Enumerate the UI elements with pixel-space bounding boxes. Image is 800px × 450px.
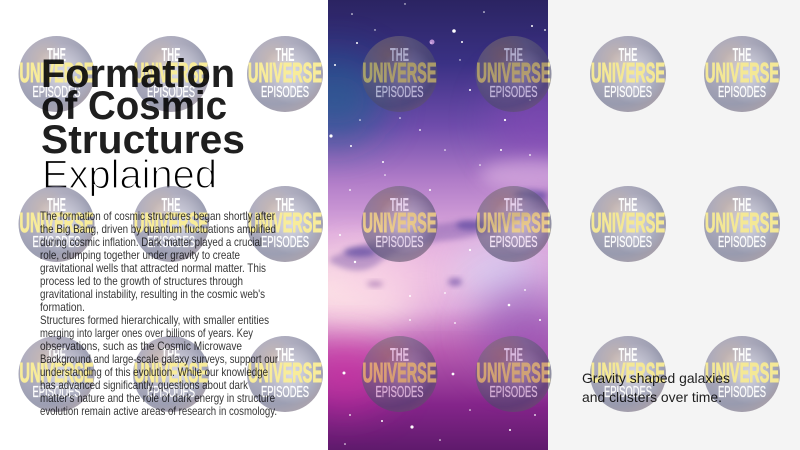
logo: row 1 col 7: THE [732,45,752,65]
logo: row 1 col 6: UNIVERSE [591,57,665,88]
logo: row 3 col 5: UNIVERSE [476,357,550,388]
logo: row 3 col 6: UNIVERSE [591,357,665,388]
logo: row 3 col 4: UNIVERSE [362,357,436,388]
panel: right background [548,0,800,450]
logo: row 2 col 1: UNIVERSE [20,207,94,238]
logo: row 2 col 7 [704,186,780,262]
caption [582,370,730,405]
body text: gravitational wells that attracted normal matter. This [40,261,266,275]
logo: row 1 col 2: UNIVERSE [134,57,208,88]
logo: row 2 col 6: EPISODES [604,234,652,251]
logo: row 3 col 6: THE [618,345,638,365]
logo: row 1 col 5 [476,36,552,112]
title: Formation [41,52,235,96]
logo: row 3 col 5: EPISODES [490,384,538,401]
title: of Cosmic [41,84,227,128]
logo: row 2 col 4: EPISODES [376,234,424,251]
logo: row 3 col 1: UNIVERSE [20,357,94,388]
logo: row 3 col 5: THE [504,345,523,365]
logo: row 2 col 4: UNIVERSE [362,207,436,238]
logo: row 1 col 5: THE [504,45,523,65]
logo: row 3 col 2: EPISODES [147,384,195,401]
body text: the Big Bang, driven by quantum fluctuations amplified [40,222,276,236]
logo: row 1 col 5: UNIVERSE [476,57,550,88]
logo: row 2 col 3 [247,186,323,262]
body text: process led to the growth of structures through [40,274,243,288]
logo: row 2 col 3: EPISODES [261,234,309,251]
logo: row 2 col 6 [590,186,666,262]
logo: row 2 col 6: THE [618,195,638,215]
logo: row 2 col 3: THE [276,195,294,215]
caption: and clusters over time. [582,389,722,405]
logo: row 1 col 3 [247,36,323,112]
logo: row 3 col 6 [590,336,666,412]
logo: row 1 col 3: EPISODES [261,84,309,101]
caption: Gravity shaped galaxies [582,370,730,386]
logo: row 1 col 7 [704,36,780,112]
logo: row 1 col 6: EPISODES [604,84,652,101]
logo: row 1 col 1 [18,36,94,112]
body text: during cosmic inflation. Dark matter played a crucial [40,235,262,249]
body text: Structures formed hierarchically, with smaller entities [40,313,269,327]
watermark logos [18,36,780,412]
logo: row 3 col 4: EPISODES [376,384,424,401]
logo: row 2 col 7: THE [732,195,752,215]
logo: row 2 col 4: THE [390,195,409,215]
logo: row 3 col 2: UNIVERSE [134,357,208,388]
logo: row 2 col 1: THE [47,195,66,215]
logo: row 1 col 4: THE [390,45,409,65]
logo: row 2 col 7: EPISODES [718,234,766,251]
body text: evolution remain active areas of research in cosmology. [40,404,277,418]
logo: row 3 col 1 [18,336,94,412]
logo: row 1 col 6 [590,36,666,112]
panel: galaxy image [328,0,548,450]
logo: row 3 col 6: EPISODES [604,384,652,401]
body text: Background and large-scale galaxy surveys, support our [40,352,278,366]
logo: row 3 col 2 [133,336,209,412]
logo: row 1 col 2 [133,36,209,112]
body text: merging into larger ones over billions of years. Key [40,326,253,340]
logo: row 3 col 7: THE [732,345,752,365]
body text [40,209,278,418]
logo: row 1 col 4: EPISODES [376,84,424,101]
logo: row 3 col 3: EPISODES [261,384,309,401]
logo: row 3 col 3: UNIVERSE [248,357,322,388]
logo: row 2 col 1: EPISODES [32,234,80,251]
logo: row 1 col 5: EPISODES [490,84,538,101]
logo: row 1 col 4 [362,36,438,112]
body text: matter's nature and the role of dark energy in structure [40,391,275,405]
logo: row 2 col 5: THE [504,195,523,215]
body text: role, clumping together under gravity to create [40,248,240,262]
logo: row 3 col 1: THE [47,345,66,365]
logo: row 2 col 5 [476,186,552,262]
logo: row 3 col 7: EPISODES [718,384,766,401]
logo: row 1 col 1: UNIVERSE [20,57,94,88]
logo: row 2 col 5: EPISODES [490,234,538,251]
logo: row 3 col 1: EPISODES [32,384,80,401]
body text: understanding of this evolution. While our knowledge [40,365,268,379]
logo: row 3 col 2: THE [162,345,180,365]
body text: formation. [40,300,85,314]
logo: row 3 col 3: THE [276,345,294,365]
logo: row 2 col 3: UNIVERSE [248,207,322,238]
logo: row 2 col 6: UNIVERSE [591,207,665,238]
body text: The formation of cosmic structures began shortly after [40,209,275,223]
logo: row 1 col 4: UNIVERSE [362,57,436,88]
logo: row 3 col 4 [362,336,438,412]
logo: row 2 col 2: THE [162,195,180,215]
logo: row 2 col 5: UNIVERSE [476,207,550,238]
subtitle word: Explained [42,153,217,197]
logo: row 2 col 2 [133,186,209,262]
logo: row 1 col 7: EPISODES [718,84,766,101]
logo: row 2 col 4 [362,186,438,262]
logo: row 1 col 3: THE [276,45,294,65]
logo: row 2 col 2: EPISODES [147,234,195,251]
logo: row 1 col 3: UNIVERSE [248,57,322,88]
title [41,52,245,162]
title: Structures [41,118,245,162]
logo: row 1 col 1: THE [47,45,66,65]
logo: row 1 col 2: THE [162,45,180,65]
logo: row 3 col 7 [704,336,780,412]
body text: has advanced significantly, questions about dark [40,378,249,392]
logo: row 1 col 1: EPISODES [32,84,80,101]
logo: row 2 col 2: UNIVERSE [134,207,208,238]
body text: gravitational instability, resulting in the cosmic web's [40,287,265,301]
logo: row 1 col 6: THE [618,45,638,65]
logo: row 2 col 1 [18,186,94,262]
body text: observations, such as the Cosmic Microwave [40,339,242,353]
logo: row 1 col 2: EPISODES [147,84,195,101]
logo: row 3 col 4: THE [390,345,409,365]
logo: row 3 col 5 [476,336,552,412]
logo: row 3 col 3 [247,336,323,412]
